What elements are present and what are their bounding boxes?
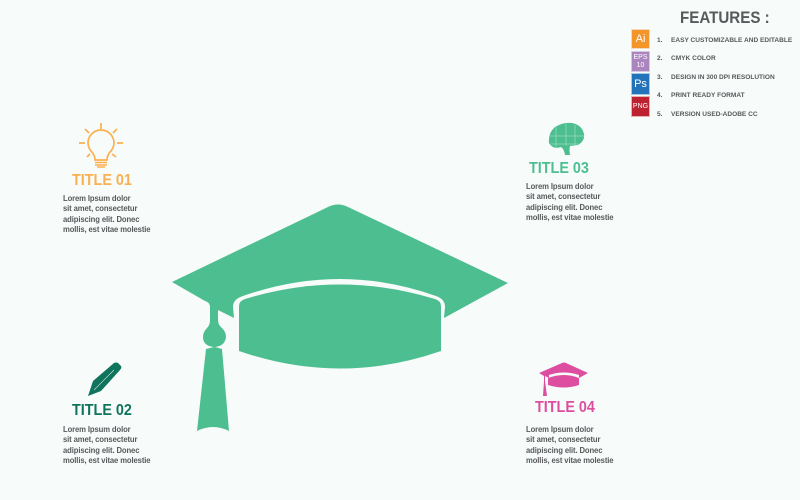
- features panel: 2.: [657, 55, 662, 62]
- text: title 02 body: adipiscing elit. Donec: [63, 445, 139, 455]
- text: title 04 body: [526, 424, 614, 465]
- panel: title 01: [63, 123, 150, 234]
- feature 3: DESIGN IN 300 DPI RESOLUTION: [671, 74, 775, 81]
- feature 1: EASY CUSTOMIZABLE AND EDITABLE: [671, 37, 792, 44]
- text: title 02 body: mollis, est vitae molestie: [63, 455, 150, 465]
- text: title 02 body: [63, 424, 150, 465]
- panel: title 04: [526, 362, 614, 465]
- text: title 04 body: mollis, est vitae molestie: [526, 455, 613, 465]
- icon: Ps badge: [631, 73, 650, 95]
- features panel: 1.: [657, 37, 662, 44]
- heading: title 04: TITLE 04: [535, 399, 595, 416]
- text: title 03 body: [526, 181, 614, 222]
- heading: title 01: TITLE 01: [72, 172, 132, 189]
- icon: Ps badge: Ps: [634, 78, 647, 90]
- text: title 03 body: Lorem Ipsum dolor: [526, 181, 594, 191]
- icon: EPS badge: 10: [637, 62, 644, 68]
- text: title 01 body: adipiscing elit. Donec: [63, 214, 139, 224]
- text: title 01 body: mollis, est vitae molestie: [63, 224, 150, 234]
- text: title 01 body: sit amet, consectetur: [63, 203, 137, 213]
- text: title 02 body: sit amet, consectetur: [63, 434, 137, 444]
- text: title 02 body: Lorem Ipsum dolor: [63, 424, 131, 434]
- text: title 04 body: Lorem Ipsum dolor: [526, 424, 594, 434]
- heading: title 03: TITLE 03: [529, 160, 589, 177]
- heading: title 02: TITLE 02: [72, 402, 132, 419]
- features panel: 3.: [657, 74, 662, 81]
- feature 2: CMYK COLOR: [671, 55, 716, 62]
- text: title 01 body: [63, 193, 150, 234]
- icon: PNG badge: PNG: [633, 103, 648, 110]
- icon: EPS badge: [631, 51, 650, 72]
- features panel: [631, 8, 792, 118]
- text: title 03 body: adipiscing elit. Donec: [526, 202, 602, 212]
- text: title 03 body: mollis, est vitae molestie: [526, 212, 613, 222]
- feature 5: VERSION USED-ADOBE CC: [671, 111, 758, 118]
- icon: PNG badge: [631, 96, 650, 117]
- text: title 04 body: sit amet, consectetur: [526, 434, 600, 444]
- text: title 03 body: sit amet, consectetur: [526, 191, 600, 201]
- features panel: 4.: [657, 92, 662, 99]
- text: title 04 body: adipiscing elit. Donec: [526, 445, 602, 455]
- icon: Ai badge: [631, 29, 650, 49]
- features heading: FEATURES :: [680, 8, 769, 27]
- icon: EPS badge: EPS: [633, 54, 648, 61]
- features panel: 5.: [657, 111, 662, 118]
- icon: Ai badge: Ai: [636, 33, 645, 45]
- feature 4: PRINT READY FORMAT: [671, 92, 745, 99]
- text: title 01 body: Lorem Ipsum dolor: [63, 193, 131, 203]
- panel: title 03: [526, 122, 614, 222]
- panel: title 02: [63, 362, 150, 465]
